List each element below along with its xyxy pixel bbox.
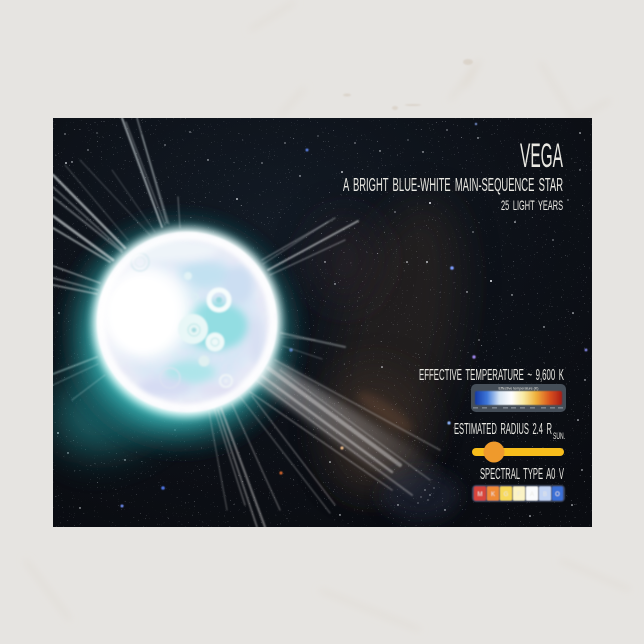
rays: lower left: [53, 357, 105, 400]
coloured bright stars: [120, 123, 587, 508]
surface mottling: [97, 232, 277, 412]
spectral class bar: A: [530, 492, 534, 498]
teal stellar glow: [53, 210, 310, 472]
light rays: [53, 118, 358, 400]
spectral class bar: K: [491, 492, 495, 498]
estimated radius label: SUN.: [553, 431, 565, 441]
temperature scale panel: Effective temperature (K): [499, 386, 538, 390]
lower right beam: [209, 358, 445, 527]
spectral class bar: M: [478, 492, 482, 498]
spectral class bar: B: [543, 492, 547, 498]
star: Vega: [92, 227, 282, 417]
rays: right: [281, 333, 345, 359]
rays: upper left: [53, 165, 128, 294]
rays: top: [80, 118, 180, 235]
white-hot bloom: [99, 264, 191, 360]
teal surface patches: [139, 263, 264, 396]
starfield: [57, 129, 586, 517]
spectral class bar: G: [504, 492, 509, 498]
surface craters: [131, 253, 232, 388]
rays: upper right: [262, 218, 358, 275]
estimated radius label: [454, 423, 565, 439]
spectral class bar: [472, 485, 565, 502]
fine star dust: [53, 118, 592, 527]
temperature scale panel: [471, 384, 566, 412]
poster panel: space scene: [33, 118, 592, 527]
spectral class bar: O: [555, 492, 560, 498]
radius slider: [472, 442, 564, 462]
distance label: 25 LIGHT YEARS: [501, 197, 563, 213]
spectral class bar: F: [517, 492, 521, 498]
poster panel: space scene: VEGA: [520, 137, 563, 175]
milky way dust band: [314, 204, 462, 521]
